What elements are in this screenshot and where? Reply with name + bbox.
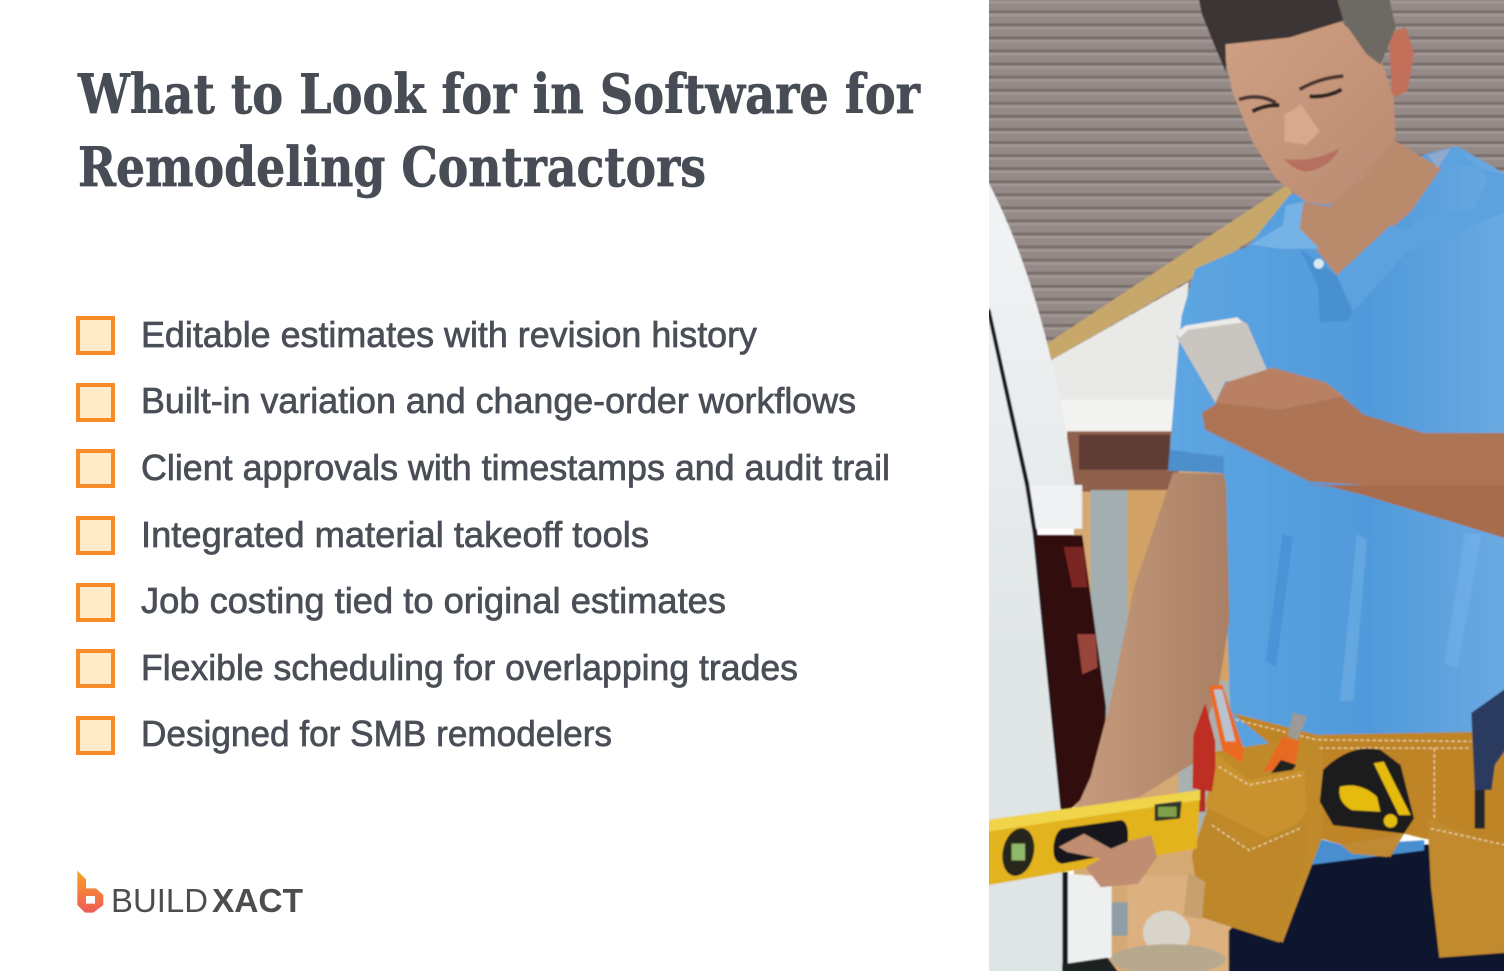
title: What to Look for in Software for [77,62,920,126]
logo: Buildxact [77,871,303,919]
title: Remodeling Contractors [78,135,706,199]
phone [1175,317,1343,410]
pouch right [1428,818,1504,958]
pliers [1209,684,1244,763]
nose [1284,105,1320,145]
eyebrows [1239,76,1343,103]
holding hand [1059,834,1157,887]
title [77,62,920,199]
logo: Buildxact: BUILD [111,882,208,919]
item: client approvals: Client approvals with timestamps and audit trail [141,447,890,488]
item: material takeoff: Integrated material takeoff tools [141,514,649,555]
tool belt [1183,684,1504,958]
building background [1067,431,1236,971]
item: flexible scheduling: Flexible scheduling for overlapping trades [141,647,798,688]
eyes [1252,89,1342,111]
tape measure [1320,748,1414,834]
icon: b mark [77,871,103,913]
tape flap [1342,834,1404,857]
face [1222,21,1396,205]
roof background [986,0,1504,436]
jeans [1229,835,1504,971]
spirit level [986,790,1200,886]
marker tool [1263,736,1300,772]
arm [1076,473,1229,810]
checklist [78,314,890,754]
item: SMB remodelers: Designed for SMB remodelers [141,713,612,754]
pouch left [1205,753,1306,844]
item: change-order workflows: Built-in variation and change-order workflows [141,380,856,421]
screwdriver [1192,703,1215,792]
head [1199,0,1414,205]
handle tool [1471,688,1504,790]
forearm and hand [1202,368,1504,539]
neck [1300,138,1441,276]
item: editable estimates: Editable estimates with revision history [141,314,758,355]
tube [1183,872,1205,919]
shirt [1168,146,1504,768]
collar and placket [1251,146,1504,322]
stitching [1212,720,1504,850]
mouth [1284,148,1340,172]
van [986,178,1119,971]
photo: contractor with phone and tool belt [989,0,1504,971]
item: job costing: Job costing tied to original estimates [141,580,726,621]
ear [1389,27,1414,98]
logo: Buildxact: XACT [212,882,303,919]
hair [1199,0,1396,73]
